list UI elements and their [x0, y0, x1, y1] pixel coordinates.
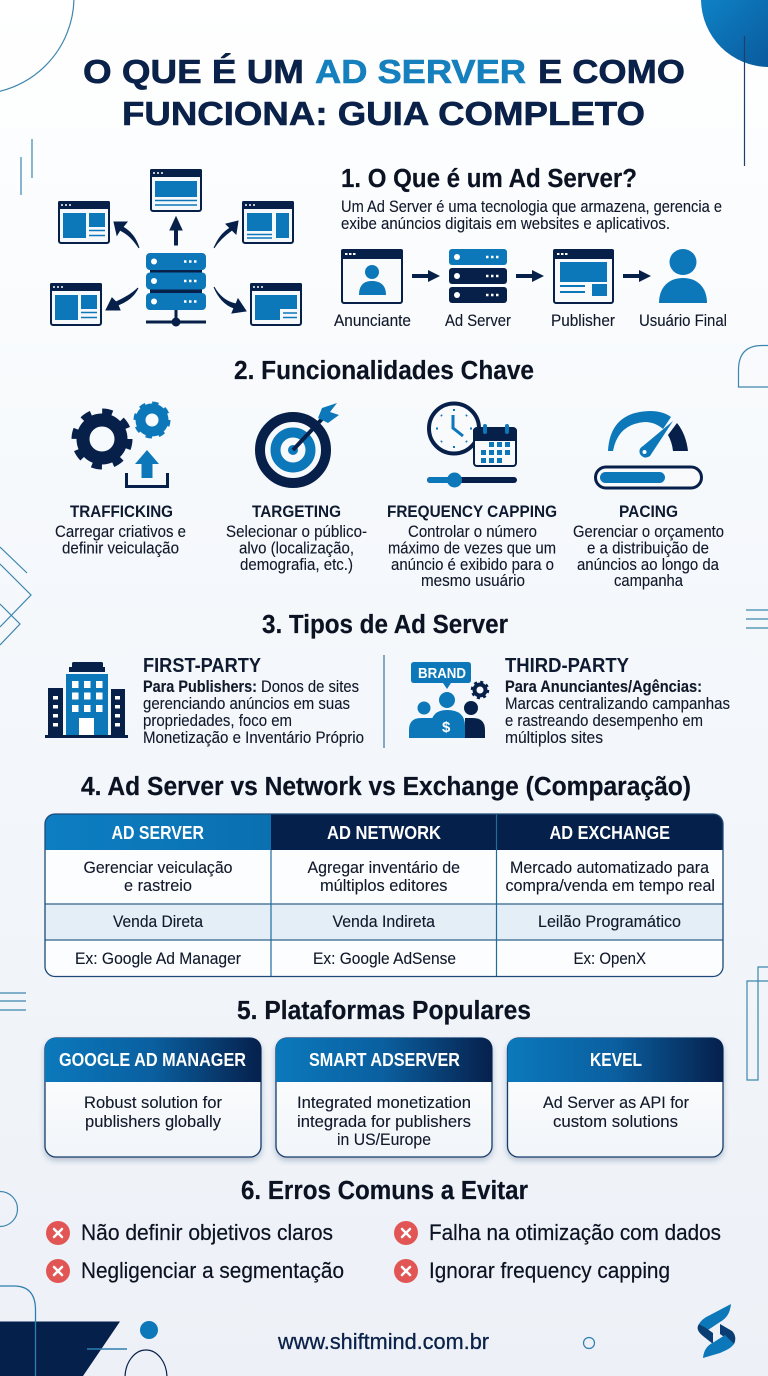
table row: purpose: Agregar inventário de [308, 859, 460, 877]
mistake 3: Falha na otimização com dados [429, 1220, 721, 1245]
card: kevel [508, 1038, 723, 1157]
footer decoration [0, 1286, 594, 1376]
card: smart adserver: Integrated monetization [297, 1094, 471, 1112]
icon: upper left window [58, 201, 110, 243]
icon: brand team: BRAND [418, 665, 466, 682]
table header [112, 823, 670, 843]
comparison table [45, 814, 723, 976]
third-party text: múltiplos sites [505, 729, 603, 747]
icon: office building [45, 662, 128, 738]
decoration: top right circle [701, 0, 768, 67]
arrow [623, 270, 651, 282]
icon: brand team [409, 662, 488, 738]
intro paragraph [341, 198, 722, 233]
table row: examples: Ex: Google Ad Manager [75, 950, 241, 968]
card: kevel: Ad Server as API for [543, 1094, 689, 1112]
section 6: common mistakes [46, 1177, 721, 1283]
third-party text [505, 655, 730, 747]
table row: purpose: compra/venda em tempo real [506, 877, 715, 895]
heading 3: 3. Tipos de Ad Server [262, 611, 508, 639]
table row: sale type: Venda Indireta [332, 913, 436, 931]
card: smart adserver: in US/Europe [337, 1131, 431, 1149]
third-party text: THIRD-PARTY [505, 655, 630, 677]
feature: frequency capping: Controlar o número [408, 523, 537, 541]
table row: purpose: e rastreio [124, 877, 192, 895]
table header: AD NETWORK [327, 823, 441, 843]
third-party text: Marcas centralizando campanhas [505, 695, 730, 713]
feature: pacing: Gerenciar o orçamento [573, 523, 724, 541]
third-party text: Para Anunciantes/Agências: [505, 678, 702, 696]
card: smart adserver: SMART ADSERVER [309, 1050, 460, 1070]
feature: trafficking: TRAFFICKING [70, 502, 173, 521]
footer url: www.shiftmind.com.br [277, 1329, 489, 1354]
card: google ad manager: publishers globally [85, 1113, 222, 1131]
heading 1: 1. O Que é um Ad Server? [341, 165, 637, 193]
first-party text: gerenciando anúncios em suas [143, 695, 350, 713]
intro paragraph: exibe anúncios digitais em websites e aplicativos. [341, 215, 670, 233]
mistake 2: Negligenciar a segmentação [81, 1258, 344, 1283]
feature: trafficking [55, 502, 186, 558]
table row: sale type: Leilão Programático [538, 913, 681, 931]
section 3: ad server types [45, 611, 730, 748]
title: AD SERVER [315, 54, 526, 91]
section 1: what is an ad server [334, 165, 727, 330]
icon: upper right window [242, 201, 294, 243]
panel: network diagram [50, 169, 302, 326]
flow labels: Usuário Final [639, 312, 727, 330]
first-party text: FIRST-PARTY [143, 655, 262, 677]
card: kevel: KEVEL [590, 1050, 642, 1070]
heading 5: 5. Plataformas Populares [237, 997, 531, 1025]
section 2: key features [55, 357, 724, 590]
icon: publisher window [553, 249, 614, 303]
feature: targeting: alvo (localização, [239, 540, 354, 558]
icon: advertiser window [341, 249, 403, 303]
icon: brand team: $ [442, 719, 451, 736]
table header: AD EXCHANGE [550, 823, 670, 843]
logo [698, 1304, 735, 1358]
table row: examples [75, 950, 646, 968]
icon: lower right window [250, 283, 302, 325]
table row: examples: Ex: Google AdSense [313, 950, 456, 968]
table row: purpose [84, 859, 715, 895]
card: smart adserver [276, 1038, 492, 1157]
feature: targeting: demografia, etc.) [240, 556, 353, 574]
icon: central server [146, 253, 206, 326]
flow labels: Ad Server [445, 312, 511, 330]
mistake 1: Não definir objetivos claros [81, 1220, 333, 1245]
heading 6: 6. Erros Comuns a Evitar [241, 1177, 528, 1205]
icon: ad server stack [449, 249, 507, 303]
icon: target [260, 403, 339, 483]
card: smart adserver: integrada for publishers [297, 1113, 471, 1131]
feature: frequency capping [387, 502, 557, 590]
heading 2: 2. Funcionalidades Chave [234, 357, 534, 385]
third-party text: e rastreando desempenho em [505, 712, 703, 730]
card: google ad manager: Robust solution for [84, 1094, 223, 1112]
feature: frequency capping: mesmo usuário [421, 572, 525, 590]
feature: targeting: Selecionar o público- [226, 523, 367, 541]
card: google ad manager: GOOGLE AD MANAGER [59, 1050, 246, 1070]
section 4: comparison [45, 773, 723, 976]
feature: frequency capping: máximo de vezes que um [388, 540, 556, 558]
feature: frequency capping: FREQUENCY CAPPING [387, 502, 557, 521]
feature: targeting [226, 502, 367, 574]
first-party text: propriedades, foco em [143, 712, 292, 730]
table row: examples: Ex: OpenX [574, 950, 646, 968]
feature: frequency capping: anúncio é exibido para o [391, 556, 554, 574]
arrow [412, 270, 440, 282]
title: E COMO [538, 54, 685, 91]
flow labels: Anunciante [334, 312, 411, 330]
feature: trafficking: Carregar criativos e [55, 523, 186, 541]
heading 4: 4. Ad Server vs Network vs Exchange (Comparação) [81, 773, 691, 801]
first-party text: Para Publishers: [143, 678, 257, 696]
title: O QUE É UM [83, 53, 304, 91]
section 5: popular platforms [45, 997, 723, 1157]
arrow [516, 270, 544, 282]
flow labels: Publisher [551, 312, 615, 330]
first-party text: Monetização e Inventário Próprio [143, 729, 364, 747]
icon: lower left window [50, 283, 102, 325]
icon: pacing gauge [596, 411, 702, 488]
feature: pacing: PACING [619, 502, 678, 521]
feature: pacing [573, 502, 724, 590]
title: FUNCIONA: GUIA COMPLETO [122, 96, 645, 133]
table row: purpose: Mercado automatizado para [510, 859, 710, 877]
icon: top window [150, 169, 202, 211]
table row: sale type [113, 913, 681, 931]
icon: final user [659, 249, 707, 303]
arrows: outgoing from server [106, 217, 246, 313]
table header: AD SERVER [112, 823, 204, 843]
feature: pacing: anúncios ao longo da [577, 556, 720, 574]
mistake 4: Ignorar frequency capping [429, 1258, 670, 1283]
feature: pacing: e a distribuição de [587, 540, 709, 558]
table row: sale type: Venda Direta [113, 913, 204, 931]
card: kevel: custom solutions [553, 1113, 678, 1131]
table row: purpose: múltiplos editores [320, 877, 448, 895]
first-party text [143, 655, 364, 747]
first-party text: Donos de sites [261, 678, 359, 696]
icon: gears and upload [75, 404, 168, 486]
flow labels [334, 312, 727, 330]
icon: clock and calendar [427, 404, 517, 488]
intro paragraph: Um Ad Server é uma tecnologia que armazena, gerencia e [341, 198, 722, 216]
feature: pacing: campanha [614, 572, 684, 590]
feature: targeting: TARGETING [252, 502, 341, 521]
feature: trafficking: definir veiculação [62, 540, 179, 558]
card: google ad manager [45, 1038, 261, 1157]
table row: purpose: Gerenciar veiculação [84, 859, 232, 877]
title [83, 53, 685, 133]
